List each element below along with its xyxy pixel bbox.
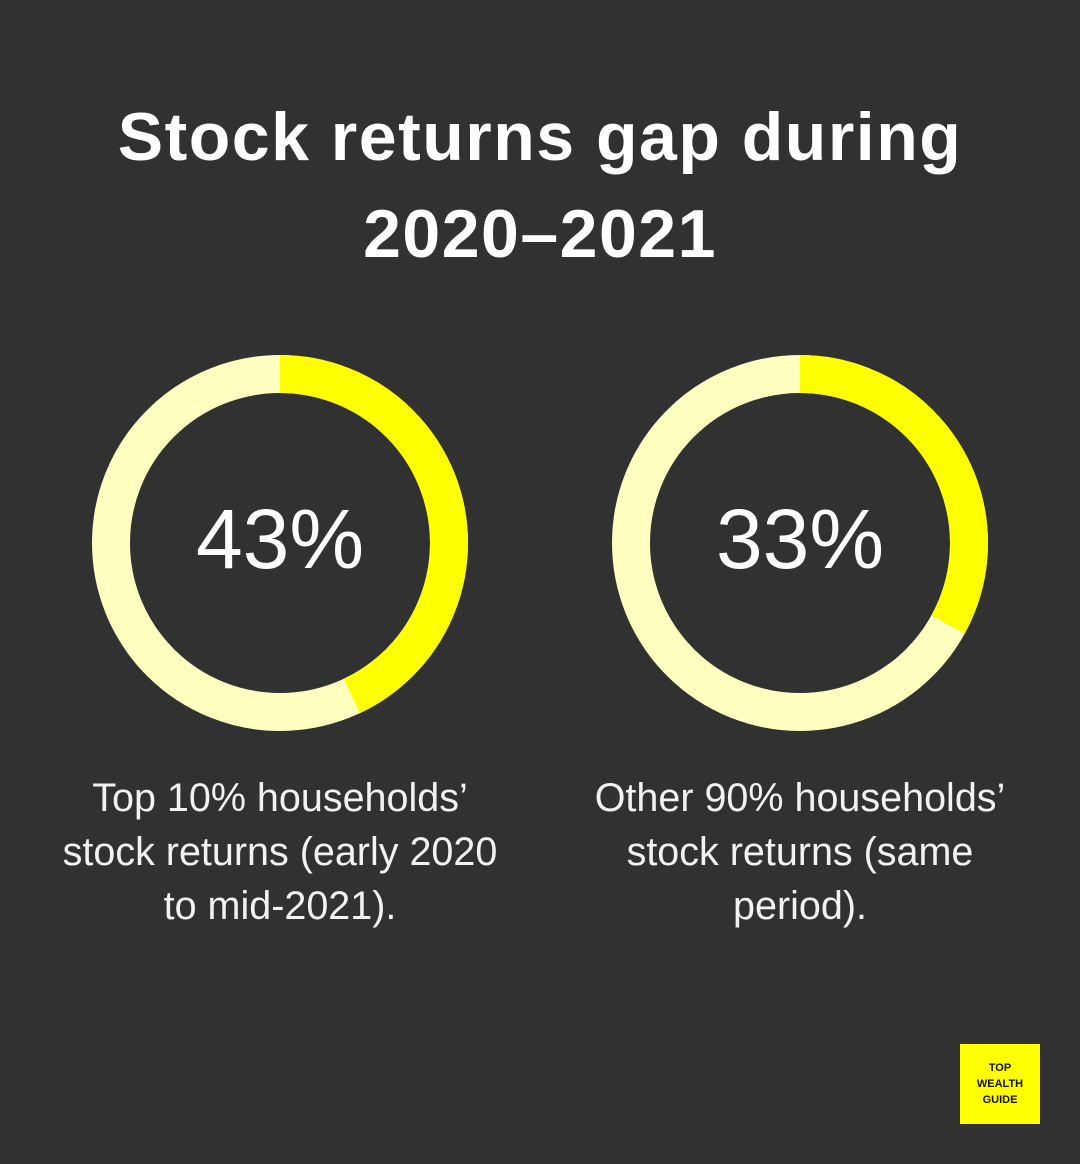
caption: top 10%: stock returns (early 2020	[63, 830, 497, 874]
donut: top 10%	[92, 355, 468, 731]
caption: other 90%: Other 90% households’	[595, 776, 1005, 820]
value: 33%: 33%	[716, 492, 884, 586]
logo: GUIDE	[983, 1094, 1017, 1106]
caption: top 10%: Top 10% households’	[92, 776, 468, 820]
value: 43%: 43%	[196, 492, 364, 586]
logo: WEALTH	[977, 1078, 1023, 1090]
caption: other 90%	[595, 776, 1005, 928]
logo: TOP	[989, 1062, 1011, 1074]
caption: top 10%: to mid-2021).	[164, 884, 396, 928]
title: 2020–2021	[363, 196, 717, 272]
caption: top 10%	[63, 776, 497, 928]
logo	[960, 1044, 1040, 1124]
caption: other 90%: stock returns (same	[627, 830, 973, 874]
donut: other 90%	[612, 355, 988, 731]
caption: other 90%: period).	[733, 884, 867, 928]
title	[118, 99, 962, 272]
title: Stock returns gap during	[118, 99, 962, 175]
